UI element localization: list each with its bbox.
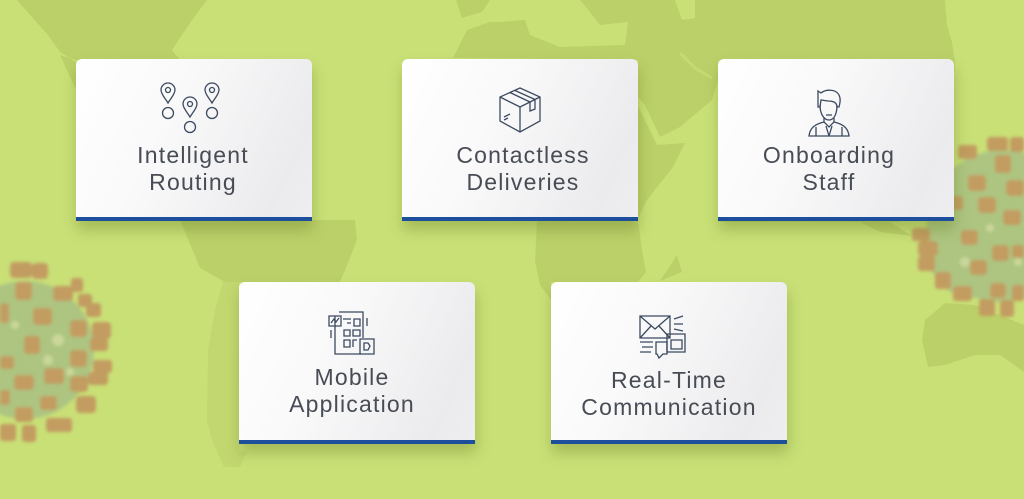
label: intelligent routing: Intelligent: [137, 142, 249, 168]
card: mobile application: [239, 282, 475, 444]
label: real-time communication: Real-Time: [611, 367, 727, 393]
card: intelligent routing: [76, 59, 312, 221]
map: central and south america: [180, 220, 357, 282]
label: contactless deliveries: [456, 142, 590, 195]
map: australia: [922, 303, 1024, 372]
icon: location pins: [160, 82, 220, 134]
map: africa: [535, 220, 646, 300]
icon: mobile app: [328, 311, 375, 355]
map: greenland fragment: [456, 0, 490, 18]
label: contactless deliveries: Deliveries: [466, 169, 579, 195]
card: contactless deliveries: [402, 59, 638, 221]
card: real-time communication: [551, 282, 787, 444]
label: contactless deliveries: Contactless: [456, 142, 590, 168]
label: mobile application: Application: [289, 391, 415, 417]
label: real-time communication: [581, 367, 757, 420]
card: onboarding staff: [718, 59, 954, 221]
label: mobile application: Mobile: [315, 364, 389, 390]
map: north america: [17, 0, 207, 90]
icon: envelope and chat: [639, 315, 686, 360]
label: intelligent routing: [137, 142, 249, 195]
icon: box: [499, 87, 541, 133]
map: south america lower strip: [207, 282, 247, 467]
map: eurasia: [453, 0, 955, 222]
label: real-time communication: Communication: [581, 394, 757, 420]
label: onboarding staff: [763, 142, 895, 195]
map: southeast asia tail: [860, 222, 912, 236]
label: intelligent routing: Routing: [149, 169, 237, 195]
label: onboarding staff: Onboarding: [763, 142, 895, 168]
map: persian gulf: [680, 53, 712, 78]
map: madagascar: [660, 255, 682, 281]
label: mobile application: [289, 364, 415, 417]
map: small inland sea: [675, 0, 695, 20]
label: onboarding staff: Staff: [803, 169, 855, 195]
icon: staff person: [808, 90, 850, 137]
map: horn of africa: [636, 102, 685, 222]
